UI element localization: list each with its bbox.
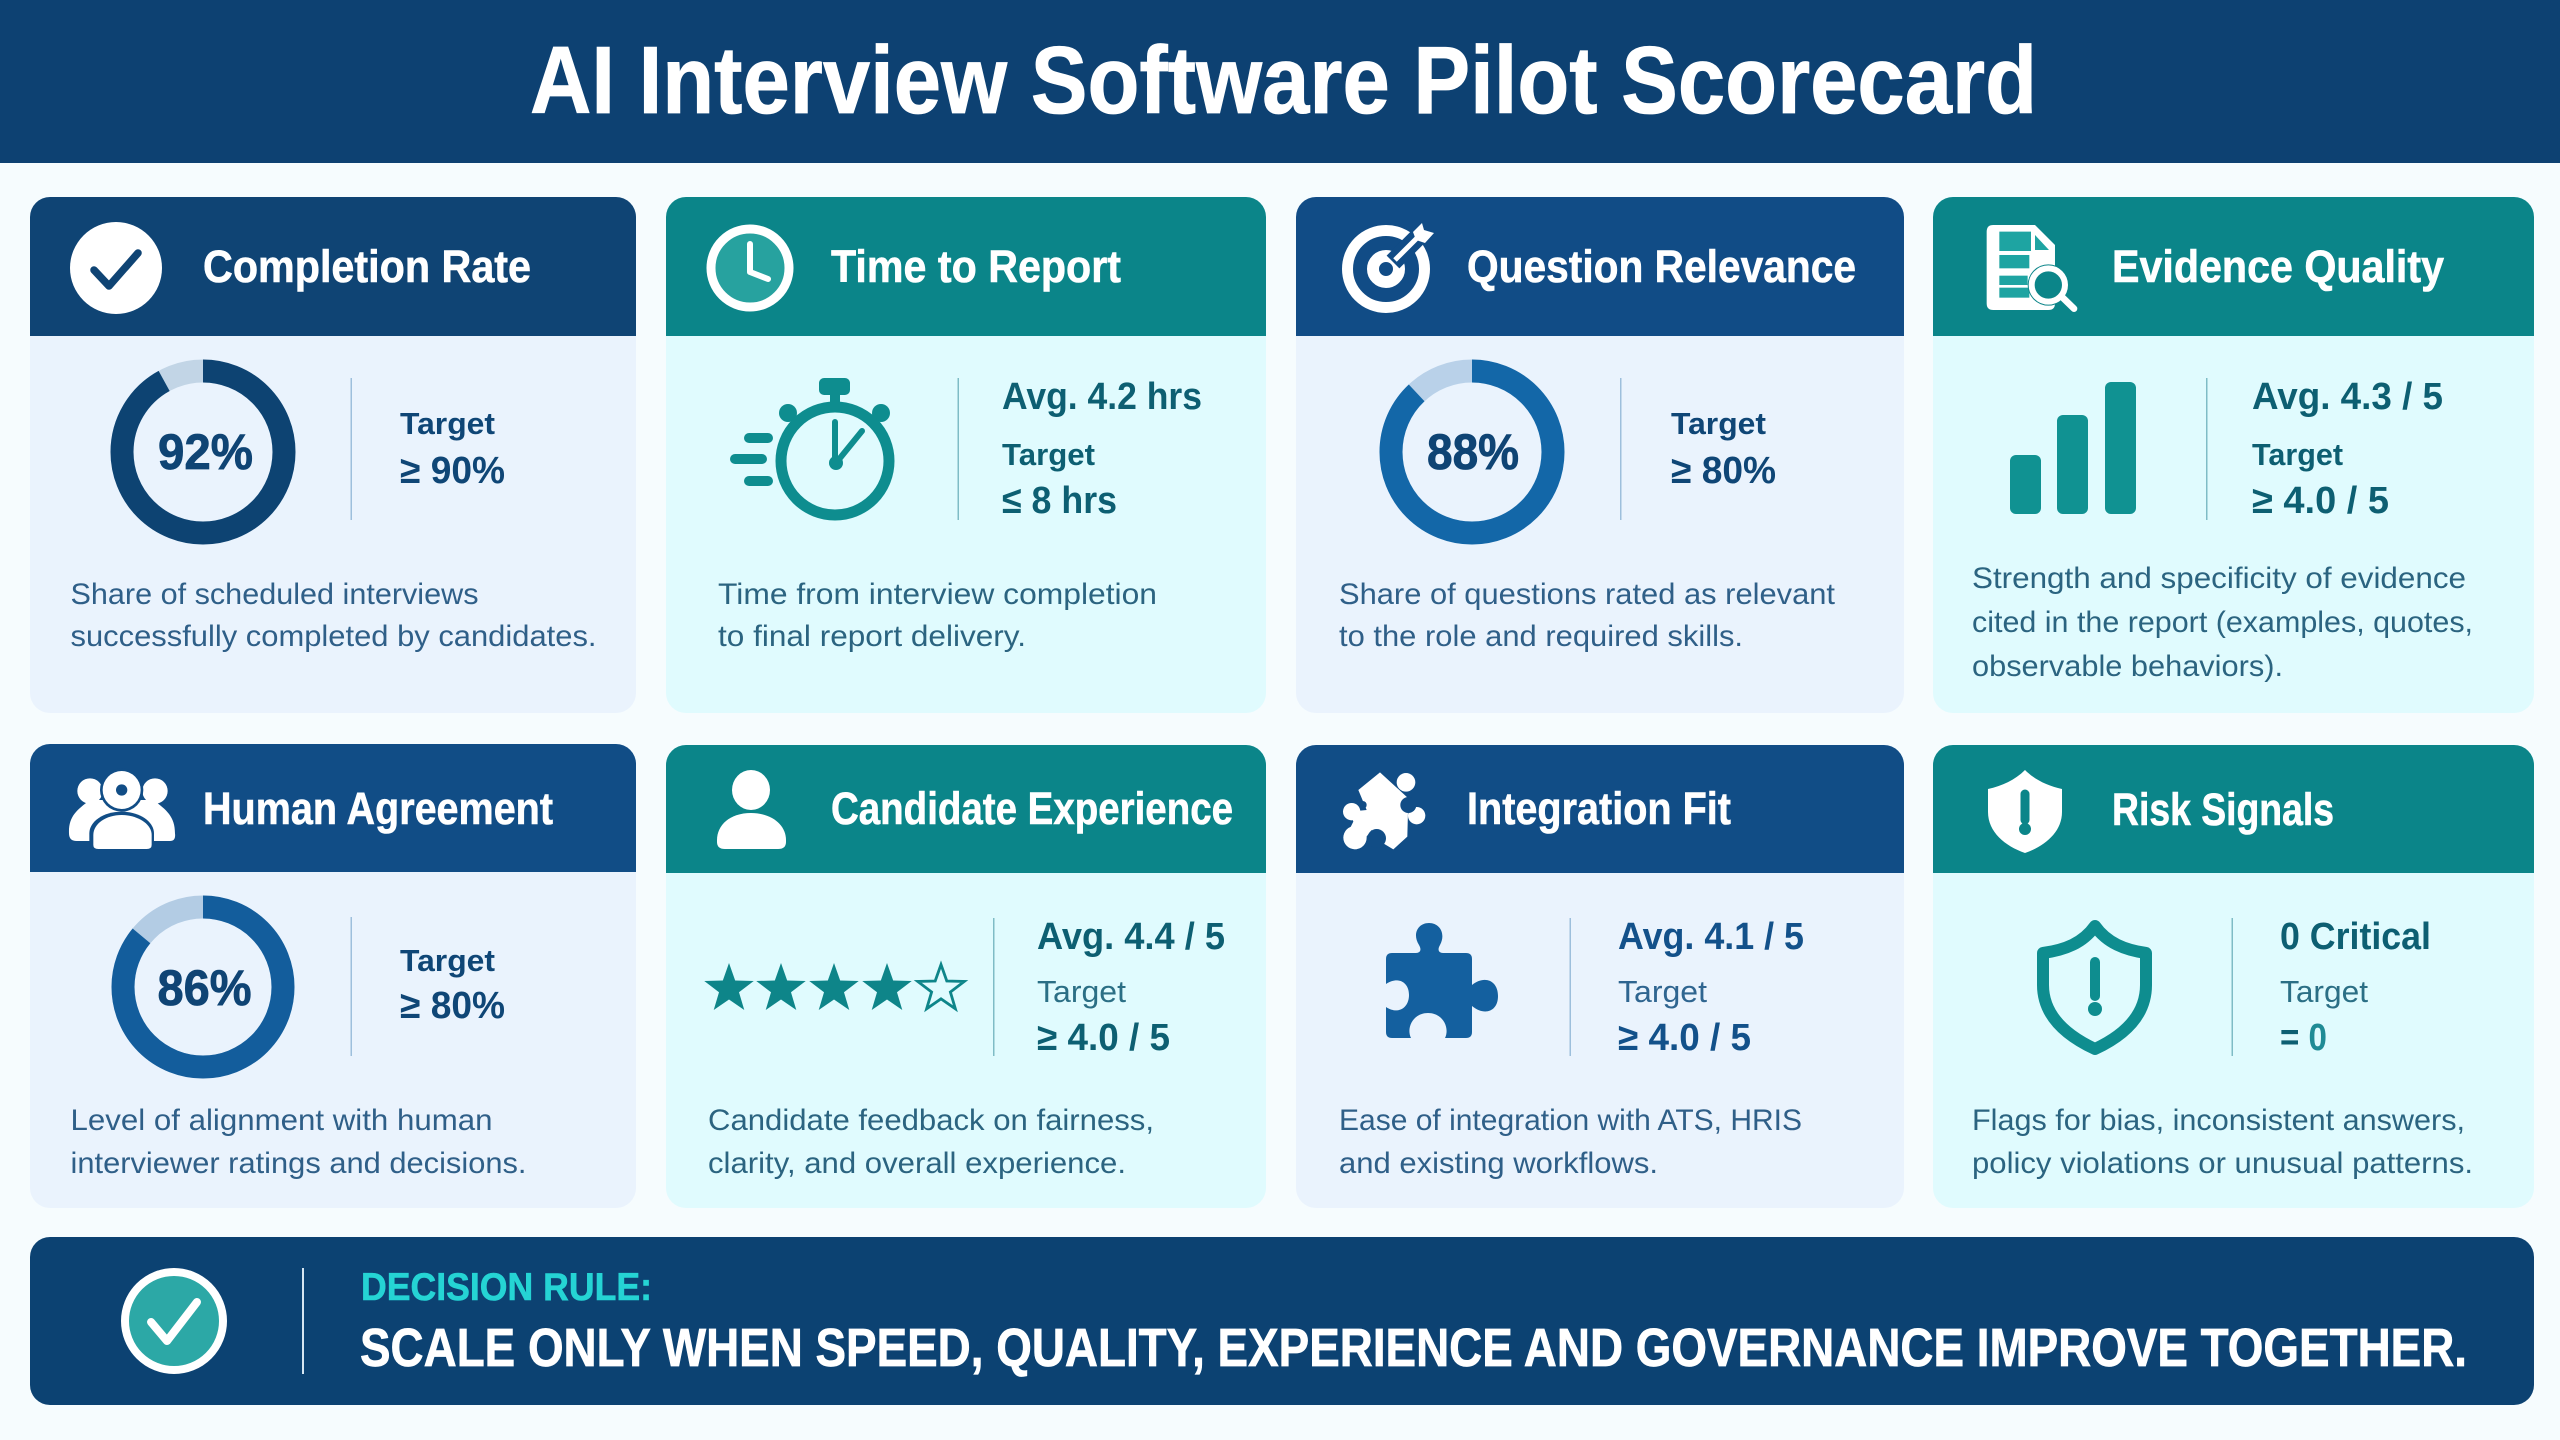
heading: Candidate Experience	[831, 783, 1233, 834]
heading: Integration Fit	[1467, 783, 1731, 834]
icon: bar chart	[2010, 382, 2136, 514]
panel: Candidate Experience	[666, 745, 1266, 1208]
donut chart 92%	[122, 371, 284, 533]
icon: stopwatch	[730, 378, 890, 515]
icon: target with arrow	[1348, 223, 1434, 308]
icon: check badge	[125, 1272, 223, 1370]
icon: white shield	[1988, 770, 2062, 853]
description: to final report delivery.	[718, 620, 1026, 653]
header band	[30, 197, 636, 336]
description	[708, 1104, 1154, 1180]
metric: Target	[1002, 437, 1095, 472]
description: observable behaviors).	[1972, 650, 2283, 683]
icon: people group	[69, 768, 175, 850]
panel: Completion Rate	[30, 197, 636, 713]
icon: teal shield	[2043, 926, 2146, 1049]
metric: = 0	[2280, 1017, 2327, 1059]
target: Target	[1671, 406, 1766, 441]
metric: Target	[1037, 974, 1126, 1009]
target: ≥ 90%	[400, 450, 505, 492]
description: and existing workflows.	[1339, 1147, 1658, 1180]
description	[1339, 578, 1836, 653]
heading: Human Agreement	[203, 783, 553, 834]
icon: document with magnifier	[1987, 225, 2074, 310]
description: Ease of integration with ATS, HRIS	[1339, 1104, 1802, 1137]
metric: 0 Critical	[2280, 916, 2431, 958]
heading: Question Relevance	[1467, 241, 1856, 292]
description: interviewer ratings and decisions.	[70, 1147, 526, 1180]
target: Target	[400, 406, 495, 441]
description: policy violations or unusual patterns.	[1972, 1147, 2473, 1180]
star rating	[704, 963, 964, 1010]
decision rule label: DECISION RULE:	[361, 1266, 652, 1309]
description: Candidate feedback on fairness,	[708, 1104, 1154, 1137]
description	[70, 1104, 526, 1180]
metric	[1618, 916, 1804, 1059]
metric: Avg. 4.4 / 5	[1037, 916, 1225, 958]
description: to the role and required skills.	[1339, 620, 1743, 653]
header band	[1933, 197, 2534, 336]
target	[1671, 406, 1776, 492]
title: AI Interview Software Pilot Scorecard	[530, 27, 2037, 134]
metric: Target	[2280, 974, 2368, 1009]
target: ≥ 80%	[1671, 450, 1776, 492]
metric	[2252, 376, 2443, 522]
description: clarity, and overall experience.	[708, 1147, 1126, 1180]
metric	[1002, 376, 1202, 522]
metric: Target	[1618, 974, 1707, 1009]
metric	[2280, 916, 2431, 1059]
donut chart 92%: 92%	[158, 424, 253, 480]
metric: ≤ 8 hrs	[1002, 480, 1117, 522]
donut chart 88%	[1391, 371, 1553, 533]
panel: Risk Signals	[1933, 745, 2534, 1208]
description: Share of questions rated as relevant	[1339, 578, 1836, 611]
description	[1972, 562, 2473, 683]
heading: Time to Report	[831, 241, 1121, 292]
description: Flags for bias, inconsistent answers,	[1972, 1104, 2465, 1137]
description: cited in the report (examples, quotes,	[1972, 606, 2473, 639]
description: Share of scheduled interviews	[70, 578, 479, 611]
icon: white puzzle piece	[1343, 772, 1425, 849]
panel: Time to Report	[666, 197, 1266, 713]
description: Level of alignment with human	[70, 1104, 492, 1137]
description: Strength and specificity of evidence	[1972, 562, 2466, 595]
header band	[666, 197, 1266, 336]
icon: person	[717, 770, 786, 849]
panel: Integration Fit	[1296, 745, 1904, 1208]
metric: ≥ 4.0 / 5	[2252, 480, 2389, 522]
description	[1972, 1104, 2473, 1180]
header band	[1933, 745, 2534, 873]
target	[400, 406, 505, 492]
heading: Evidence Quality	[2112, 241, 2444, 292]
target	[400, 943, 505, 1027]
heading: Risk Signals	[2112, 784, 2334, 835]
metric	[1037, 916, 1225, 1059]
donut chart 88%: 88%	[1427, 424, 1519, 480]
header band	[1296, 745, 1904, 873]
target: ≥ 80%	[400, 985, 505, 1027]
description	[718, 578, 1157, 653]
header band	[30, 744, 636, 872]
donut chart 86%	[123, 907, 283, 1067]
target: Target	[400, 943, 495, 978]
header band	[1296, 197, 1904, 336]
metric: ≥ 4.0 / 5	[1618, 1017, 1751, 1059]
panel: Question Relevance	[1296, 197, 1904, 713]
metric: Avg. 4.3 / 5	[2252, 376, 2443, 418]
heading: Completion Rate	[203, 241, 531, 292]
metric: Avg. 4.2 hrs	[1002, 376, 1202, 418]
description: successfully completed by candidates.	[70, 620, 596, 653]
description	[1339, 1104, 1802, 1180]
panel: Evidence Quality	[1933, 197, 2534, 713]
metric: ≥ 4.0 / 5	[1037, 1017, 1170, 1059]
panel: Human Agreement	[30, 744, 636, 1208]
title bar	[0, 0, 2560, 163]
metric: Avg. 4.1 / 5	[1618, 916, 1804, 958]
icon: check circle	[70, 222, 162, 314]
header band	[666, 745, 1266, 873]
donut chart 86%: 86%	[158, 960, 252, 1016]
description: Time from interview completion	[718, 578, 1157, 611]
icon: blue puzzle piece	[1386, 923, 1498, 1038]
description	[70, 578, 596, 653]
metric: Target	[2252, 437, 2343, 472]
panel: decision rule banner	[30, 1237, 2534, 1405]
icon: clock	[711, 229, 789, 307]
